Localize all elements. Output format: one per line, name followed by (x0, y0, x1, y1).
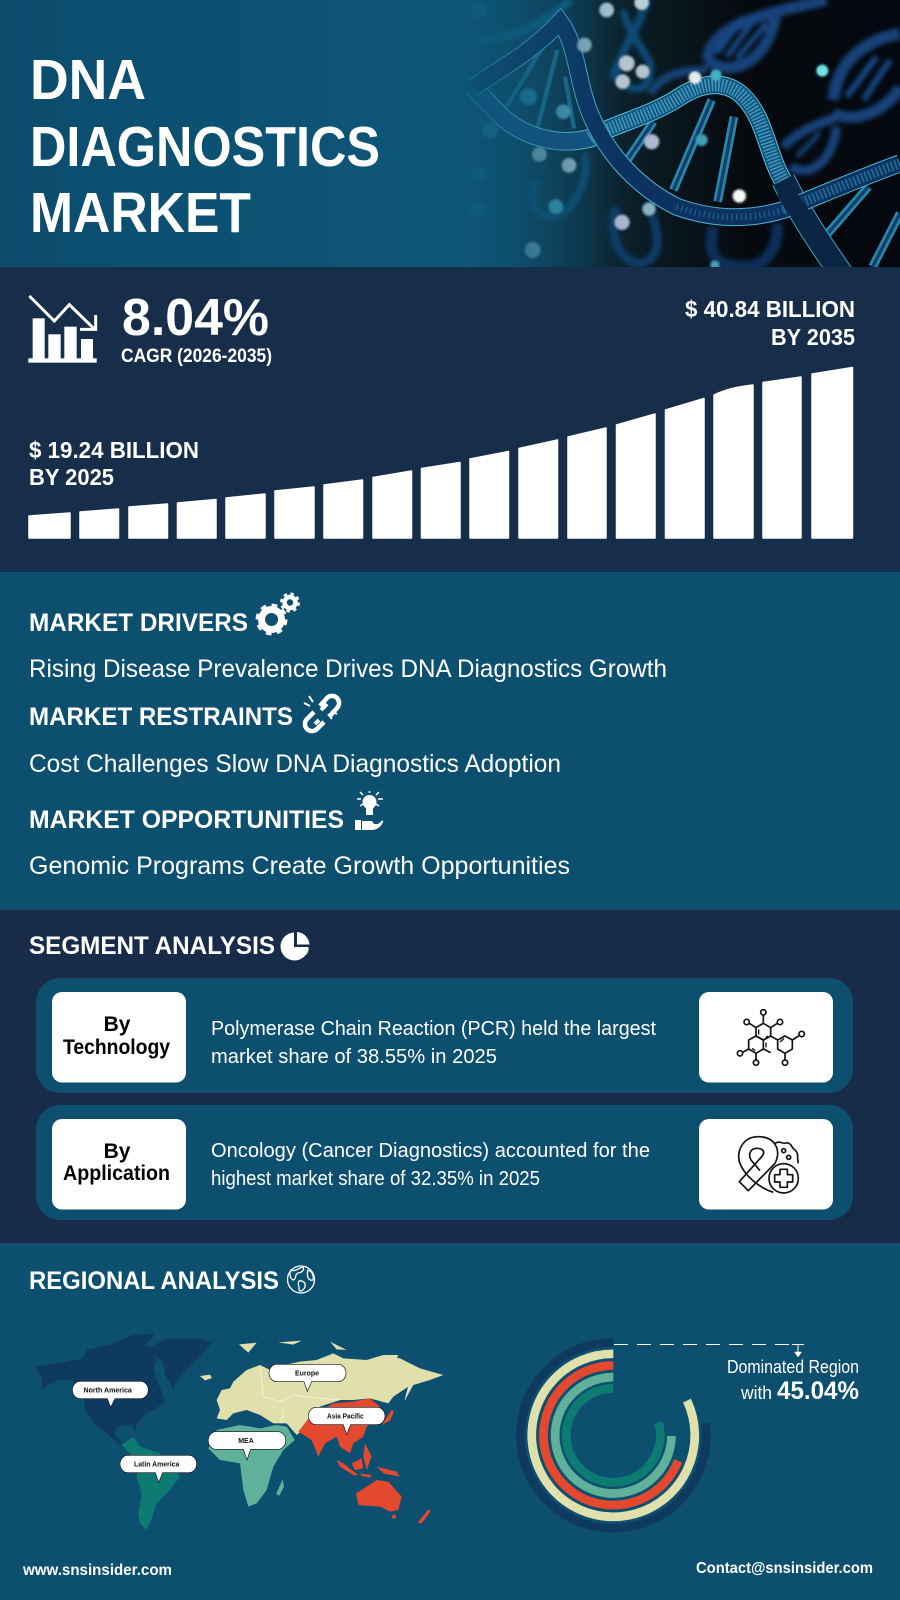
title: DIAGNOSTICS (30, 115, 380, 179)
heading: market restraints: MARKET RESTRAINTS (29, 703, 293, 731)
text: restraint: Cost Challenges Slow DNA Diagnostics Adoption (29, 750, 561, 778)
text: technology finding (211, 1018, 656, 1068)
callout: Latin America (120, 1455, 197, 1483)
card: by technology (36, 978, 853, 1093)
label box: by technology: By (104, 1013, 131, 1036)
icon box: molecule (699, 992, 833, 1082)
panel: header (0, 0, 900, 277)
icon: pie chart (281, 932, 310, 960)
label box: by application (52, 1119, 186, 1210)
icon: chart with declining arrow (28, 296, 97, 363)
stat: 2025 market size: BY 2025 (29, 464, 114, 490)
stat: 2035 market size: $ 40.84 BILLION (685, 296, 855, 322)
label box: by technology (52, 992, 186, 1082)
arrow: dominated region pointer (614, 1344, 804, 1357)
stat: CAGR label: CAGR (2026-2035) (121, 346, 272, 367)
icon: hand holding lightbulb (355, 791, 383, 830)
stat: 2025 market size (29, 437, 199, 490)
footer: website: www.snsinsider.com (22, 1562, 172, 1579)
chart: radial regional share (520, 1342, 706, 1528)
text: dominated region (727, 1357, 859, 1405)
region: Europe and Russia (200, 1341, 443, 1435)
image: DNA helix (469, 0, 900, 277)
panel: regional analysis (0, 1243, 900, 1600)
heading: market drivers: MARKET DRIVERS (29, 609, 248, 637)
stat: 2035 market size: BY 2035 (771, 324, 855, 350)
stat: 2035 market size (685, 296, 855, 350)
card: by application (36, 1105, 853, 1220)
callout: Latin America: Latin America (134, 1461, 179, 1468)
text: dominated region: Dominated Region (727, 1357, 859, 1377)
label box: by application: Application (63, 1162, 170, 1185)
callout: Europe: Europe (295, 1371, 319, 1378)
strand: back (473, 85, 843, 277)
footer: contact: Contact@snsinsider.com (696, 1560, 873, 1577)
icon: gears (258, 594, 298, 634)
callout: Asia Pacific (308, 1407, 385, 1435)
icon: broken chain (304, 696, 339, 731)
callout: North America (72, 1381, 148, 1407)
region: North America (35, 1333, 212, 1445)
panel: market size and CAGR (0, 267, 900, 572)
stat: CAGR value: 8.04% (122, 289, 269, 347)
text: driver: Rising Disease Prevalence Drives DNA Diagnostics Growth (29, 655, 667, 683)
callout: Europe (269, 1364, 346, 1391)
icon box: cancer ribbon (699, 1119, 833, 1210)
panel: drivers, restraints, opportunities (0, 572, 900, 910)
text: technology finding: Polymerase Chain Reaction (PCR) held the largest (211, 1018, 656, 1040)
callout: North America: North America (83, 1387, 132, 1394)
text: application finding (211, 1140, 650, 1190)
heading: market opportunities: MARKET OPPORTUNITIES (29, 806, 344, 834)
text: opportunity: Genomic Programs Create Growth Opportunities (29, 852, 570, 880)
glowing particles (469, 0, 828, 270)
text: technology finding: market share of 38.55% in 2025 (211, 1046, 497, 1068)
callout: MEA: MEA (238, 1438, 254, 1445)
map: world regions (35, 1333, 443, 1530)
callout: MEA (208, 1432, 286, 1460)
heading: regional analysis: REGIONAL ANALYSIS (29, 1267, 279, 1295)
region borders (260, 1367, 408, 1423)
region: Asia Pacific (298, 1398, 431, 1523)
title: DNA (30, 48, 146, 112)
region: Middle East and Africa (208, 1425, 295, 1507)
strand: front (473, 22, 900, 217)
label box: by application: By (104, 1140, 131, 1163)
text: dominated region: with (740, 1383, 772, 1403)
text: dominated region: 45.04% (777, 1377, 859, 1405)
title (30, 48, 380, 245)
front overlap (776, 194, 808, 217)
label box: by technology: Technology (63, 1036, 170, 1059)
text: application finding: highest market share of 32.35% in 2025 (211, 1168, 540, 1190)
icon: globe (288, 1266, 314, 1293)
callout: Asia Pacific: Asia Pacific (327, 1414, 364, 1421)
heading: segment analysis: SEGMENT ANALYSIS (29, 932, 275, 960)
stat: 2025 market size: $ 19.24 BILLION (29, 437, 199, 463)
region: Latin America (122, 1437, 180, 1530)
bar chart: market growth (29, 368, 852, 538)
text: application finding: Oncology (Cancer Diagnostics) accounted for the (211, 1140, 650, 1162)
rungs (503, 35, 900, 267)
panel: segment analysis (0, 910, 900, 1243)
title: MARKET (30, 181, 251, 245)
